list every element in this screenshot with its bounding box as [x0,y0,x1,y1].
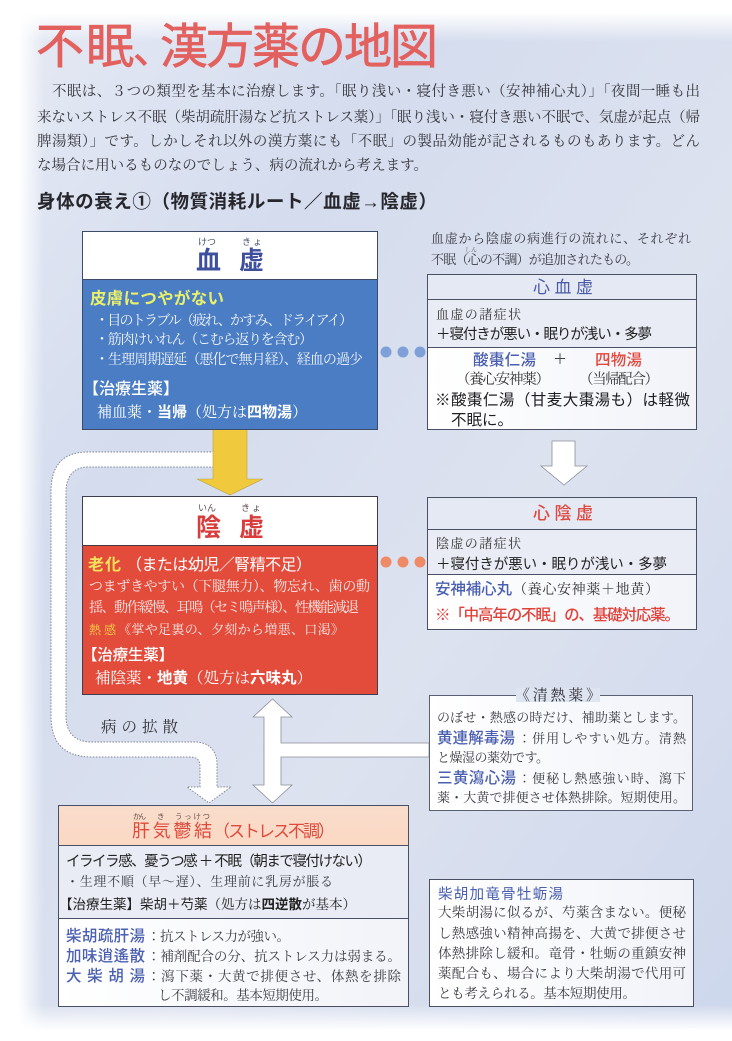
symptoms [90,288,363,368]
formula: ※酸棗仁湯（甘麦大棗湯も）は軽微 [435,391,690,409]
formula: 酸棗仁湯 [473,351,536,369]
formulas: し不調緩和。基本短期使用。 [158,987,328,1003]
intro paragraph: 不眠は、３つの類型を基本に治療します。「眠り浅い・寝付き悪い（安神補心丸）」「夜間一睡も出 [52,82,700,100]
body: と燥湿の薬効です。 [437,750,549,765]
note: progression: 不眠（心の不調）が追加されたもの。 [431,252,639,267]
symptoms [436,307,652,343]
symptoms: 老化 [88,556,121,574]
symptoms: ・目のトラブル（疲れ、かすみ、ドライアイ） [95,313,353,329]
treatment: 【治療生薬】 [83,380,179,398]
heading: き [157,812,164,821]
formula: 不眠に。 [451,412,513,429]
body: 薬・大黄で排便させ体熱排除。短期使用。 [437,790,686,805]
heading: 心陰虚 [533,504,593,523]
heading: inkyo: きょ [241,503,261,513]
label: disease diffusion: 病の拡散 [101,717,178,736]
symptoms: ・生理不順（早～遅）、生理前に乳房が脹る [66,874,333,889]
intro paragraph: 脾湯類）」です。しかしそれ以外の漢方薬にも「不眠」の製品効能が記されるものもあります。どん [37,132,700,150]
heading: 《清熱薬》 [515,686,601,704]
body: とも考えられる。基本短期使用。 [438,985,636,1001]
treatment: 補血薬・当帰（処方は四物湯） [97,403,307,421]
body: 体熱排除し緩和。竜骨・牡蛎の重鎮安神 [438,945,686,961]
body: ：併用しやすい処方。清熱 [518,731,687,746]
body: し熱感強い精神高揚を、大黄で排便させ [438,925,686,941]
body: のぼせ・熱感の時だけ、補助薬とします。 [437,710,686,725]
formula: 安神補心丸 [435,580,512,598]
formulas: ：抗ストレス力が強い。 [147,928,290,944]
note: progression: しん [465,247,477,254]
formula: （養心安神薬＋地黄） [513,581,659,598]
title: 漢方薬の地図 [160,21,438,74]
diffusion dotted arrow [51,452,231,803]
symptoms [59,853,372,912]
body: ：便秘し熱感強い時、瀉下 [518,771,686,786]
intro paragraph: 来ないストレス不眠（柴胡疏肝湯など抗ストレス薬）」「眠り浅い・寝付き悪い不眠で、気虚が起点（帰 [37,108,700,126]
panel: yin deficiency [82,496,378,694]
symptoms: 揺、動作緩慢、耳鳴（セミ鳴声様）、性機能減退 [89,599,359,616]
intro paragraph [37,82,700,174]
body: 黄連解毒湯 [437,729,515,747]
heading: inkyo [196,503,264,542]
symptoms: 熱感 [89,622,117,637]
formulas: ：瀉下薬・大黄で排便させ、体熱を排除 [147,968,402,984]
heading: かん [133,812,146,821]
formula: （養心安神薬） [456,370,550,388]
heading: inkyo: 虚 [239,514,264,542]
formula: ＋ [553,351,567,367]
heading: ketsukyo: 血 [196,247,221,275]
symptoms: 《掌や足裏の、夕刻から増悪、口渇》 [118,622,344,637]
symptoms [88,556,370,637]
formula [435,580,680,624]
heading: inkyo: 陰 [196,514,221,542]
connector dots orange [380,556,426,568]
yellow arrow [197,429,263,495]
symptoms: 【治療生薬】柴胡＋芍薬（処方は四逆散が基本） [59,896,356,912]
heading: 肝気鬱結 [132,821,212,841]
formulas: 加味逍遙散 [66,947,145,965]
heading: （ストレス不調） [213,822,335,841]
formulas: 大柴胡湯 [66,967,145,985]
heading: inkyo: いん [198,503,216,513]
panel: heart blood deficiency [428,274,696,430]
treatment [82,646,312,687]
symptoms: ・生理周期遅延（悪化で無月経）、経血の過少 [95,351,363,368]
symptoms: ＋寝付きが悪い・眠りが浅い・多夢 [436,555,667,573]
body: 大柴胡湯に似るが、芍薬含まない。便秘 [438,904,686,920]
heading: 柴胡加竜骨牡蛎湯 [438,886,563,903]
formulas: 柴胡疏肝湯 [66,927,145,945]
heading: ketsukyo: 虚 [239,247,264,275]
symptoms: （または幼児／腎精不足） [126,556,312,574]
heading: うっけつ [175,812,210,821]
treatment [83,380,307,421]
panel: liver qi stagnation [58,806,408,1006]
panel: saiko ka ryukotsu borei to [430,880,694,1006]
panel: heat-clearing herbs [430,686,692,810]
symptoms [436,536,667,573]
body [438,904,686,1001]
symptoms: 血虚の諸症状 [436,307,521,322]
panel: blood deficiency [82,232,378,430]
body: 三黄瀉心湯 [437,769,516,787]
symptoms: つまずきやすい（下腿無力）、物忘れ、歯の動 [89,578,370,595]
heading: 心血虚 [533,278,593,297]
formula: ※「中高年の不眠」の、基礎対応薬。 [435,606,680,624]
body [437,710,687,805]
body: 薬配合も、場合により大柴胡湯で代用可 [438,965,686,981]
note: progression: 血虚から陰虚の病進行の流れに、それぞれ [431,231,691,246]
formulas: ：補剤配合の分、抗ストレス力は弱まる。 [147,948,401,964]
formulas [66,927,402,1003]
note: progression [431,231,691,267]
formula: （当帰配合） [579,371,659,388]
heading: ketsukyo: けつ [198,237,216,247]
intro paragraph: な場合に用いるものなのでしょう、病の流れから考えます。 [37,156,428,174]
treatment: 【治療生薬】 [82,646,174,664]
symptoms: イライラ感、憂うつ感 ＋ 不眠（朝まで寝付けない） [66,853,372,870]
symptoms: ・筋肉けいれん（こむら返りを含む） [95,331,313,348]
heading: ketsukyo [196,237,264,275]
title [36,21,438,74]
white down arrow [541,441,587,485]
section heading: 身体の衰え①（物質消耗ルート／血虚→陰虚） [37,191,437,212]
connector dots blue [380,346,426,358]
white double arrow and connector [253,699,429,803]
symptoms: ＋寝付きが悪い・眠りが浅い・多夢 [436,325,652,343]
panel: heart yin deficiency [428,498,696,630]
heading: ketsukyo: きょ [242,237,262,247]
heading [132,812,335,841]
symptoms: 陰虚の諸症状 [436,536,521,551]
formula: 四物湯 [595,351,642,369]
treatment: 補陰薬・地黄（処方は六味丸） [95,669,312,687]
title: 、 [133,28,173,72]
formula [435,351,690,429]
title: 不眠 [36,21,134,74]
symptoms: 皮膚につやがない [90,288,224,308]
